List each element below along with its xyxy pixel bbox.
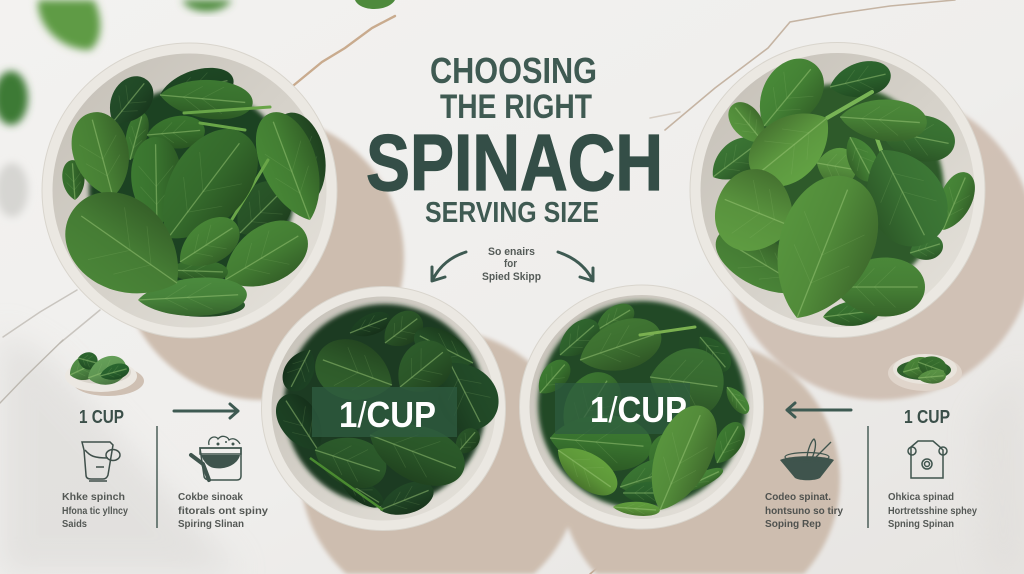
subtitle note: So enairs	[488, 246, 535, 258]
serving labels: 1 CUP	[79, 407, 950, 427]
left small dish	[65, 350, 144, 396]
caption: chicken spinach: Spning Spinan	[888, 518, 954, 530]
bowl: raw spinach, top left	[42, 43, 338, 338]
arrow: pointing right	[174, 404, 238, 418]
caption: cooked spinach	[178, 491, 268, 530]
subtitle note: Spied Skipp	[482, 271, 541, 283]
caption: coded spinach: hontsuno so tiry	[765, 505, 843, 517]
bowl: cooked spinach, 1/CUP left	[262, 286, 509, 530]
vertical dividers	[157, 426, 868, 528]
label band: 1/CUP: 1/CUP	[339, 394, 436, 435]
caption: whole spinach	[62, 491, 128, 530]
icon: mixing bowl	[780, 439, 834, 480]
arrow: pointing left	[787, 403, 851, 417]
serving labels: 1 CUP: 1 CUP	[904, 407, 950, 427]
right small dish	[888, 352, 962, 391]
caption: chicken spinach: Ohkica spinad	[888, 491, 954, 503]
caption: chicken spinach	[888, 491, 977, 530]
bowl: raw spinach, top right	[690, 42, 985, 338]
caption: coded spinach	[765, 491, 843, 530]
caption: coded spinach: Soping Rep	[765, 518, 821, 530]
title	[366, 50, 663, 229]
title: SERVING SIZE	[425, 197, 599, 229]
label band: 1/CUP: 1/CUP	[590, 389, 687, 430]
bowl shadows	[120, 90, 1024, 574]
icon: measuring cup	[82, 442, 120, 481]
arrow: curved right	[558, 252, 593, 281]
caption: cooked spinach: fitorals ont spiny	[178, 505, 268, 517]
title: SPINACH	[366, 118, 663, 207]
blurred falling leaves	[0, 0, 395, 217]
serving labels: 1 CUP: 1 CUP	[79, 407, 124, 427]
icon: cooking pot	[191, 436, 241, 480]
title: CHOOSING	[430, 50, 597, 91]
caption: chicken spinach: Hortretsshine sphey	[888, 505, 977, 517]
subtitle note	[482, 246, 541, 283]
caption: whole spinach: Hfona tic yllncy	[62, 505, 128, 517]
label band: 1/CUP	[312, 387, 457, 437]
bowl: fresh spinach, 1/CUP right	[520, 285, 764, 529]
caption: coded spinach: Codeo spinat.	[765, 491, 831, 503]
icon: food scale	[908, 441, 947, 478]
label band: 1/CUP	[555, 383, 690, 434]
arrow: curved left	[432, 252, 466, 281]
caption: whole spinach: Khke spinch	[62, 491, 125, 503]
caption: cooked spinach: Spiring Slinan	[178, 518, 244, 530]
subtitle note: for	[504, 258, 518, 270]
title: THE RIGHT	[440, 88, 592, 126]
caption: cooked spinach: Cokbe sinoak	[178, 491, 243, 503]
caption: whole spinach: Saids	[62, 518, 87, 530]
